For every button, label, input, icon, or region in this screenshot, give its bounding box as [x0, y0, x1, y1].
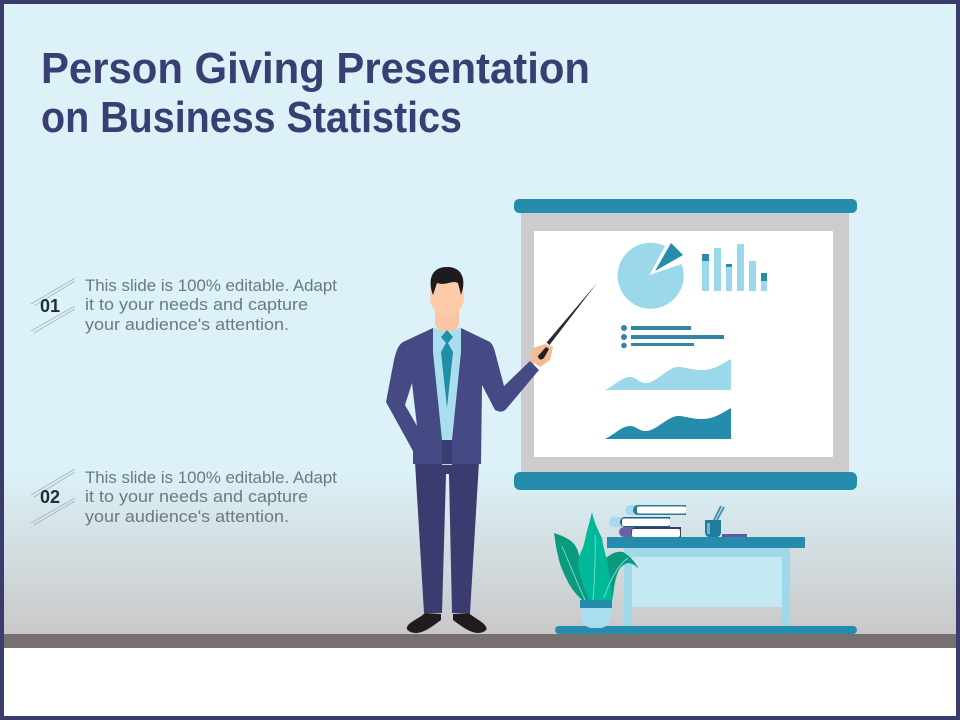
jacket centre — [442, 440, 452, 464]
leaf veins — [562, 535, 628, 600]
table — [555, 537, 857, 634]
middle book — [609, 517, 670, 527]
tie — [441, 330, 453, 408]
number badge 01: 01 — [40, 296, 60, 316]
projection screen — [514, 199, 857, 490]
title — [41, 44, 590, 142]
jacket — [386, 328, 539, 464]
right leg — [782, 548, 790, 626]
bottom roller — [514, 472, 857, 490]
description 02: your audience's attention. — [85, 508, 289, 526]
number badge 02: 02 — [40, 487, 60, 507]
text block 01 — [31, 277, 337, 334]
number badge 01 — [31, 278, 75, 333]
pen cup — [705, 506, 724, 537]
text block 02 — [31, 469, 337, 526]
left leaf — [554, 533, 590, 601]
floor strip — [0, 634, 960, 648]
white footer band — [0, 648, 960, 720]
pointer stick — [546, 283, 597, 345]
pot rim — [580, 600, 612, 608]
book stack — [609, 505, 686, 537]
number badge 02 — [31, 469, 75, 525]
description 01: This slide is 100% editable. Adapt — [85, 277, 337, 295]
right shoe — [453, 613, 487, 633]
hair — [431, 267, 463, 295]
table brace — [624, 548, 790, 557]
right leaf — [600, 552, 639, 601]
description 01: it to your needs and capture — [85, 296, 308, 314]
hand — [530, 344, 553, 367]
left shoe — [407, 613, 441, 633]
top book — [625, 505, 686, 515]
neck — [435, 305, 459, 340]
jacket pocket gap — [405, 383, 417, 426]
face — [430, 283, 464, 316]
description 01: your audience's attention. — [85, 316, 289, 334]
base platform — [555, 626, 857, 634]
centre leaf — [578, 512, 612, 601]
pencil on table — [722, 534, 751, 537]
dark area chart — [605, 408, 731, 439]
description 02: it to your needs and capture — [85, 488, 308, 506]
bottom book — [619, 527, 681, 537]
trousers — [415, 462, 479, 613]
potted plant — [554, 512, 639, 628]
description 01 — [85, 277, 337, 334]
presenter — [386, 267, 597, 633]
description 02 — [85, 469, 337, 526]
pie chart — [618, 243, 684, 309]
title: Person Giving Presentation — [41, 44, 590, 93]
light area chart — [605, 359, 731, 390]
left leg — [624, 548, 632, 626]
bullet list — [621, 325, 724, 348]
title: on Business Statistics — [41, 93, 462, 142]
under-table panel — [632, 557, 782, 607]
screen frame — [521, 212, 849, 473]
pot — [581, 608, 611, 628]
description 02: This slide is 100% editable. Adapt — [85, 469, 337, 487]
top roller — [514, 199, 857, 213]
bar chart — [702, 244, 767, 291]
screen white area — [534, 231, 833, 457]
shirt — [431, 327, 464, 465]
pointer grip — [538, 347, 549, 359]
table top — [607, 537, 805, 548]
